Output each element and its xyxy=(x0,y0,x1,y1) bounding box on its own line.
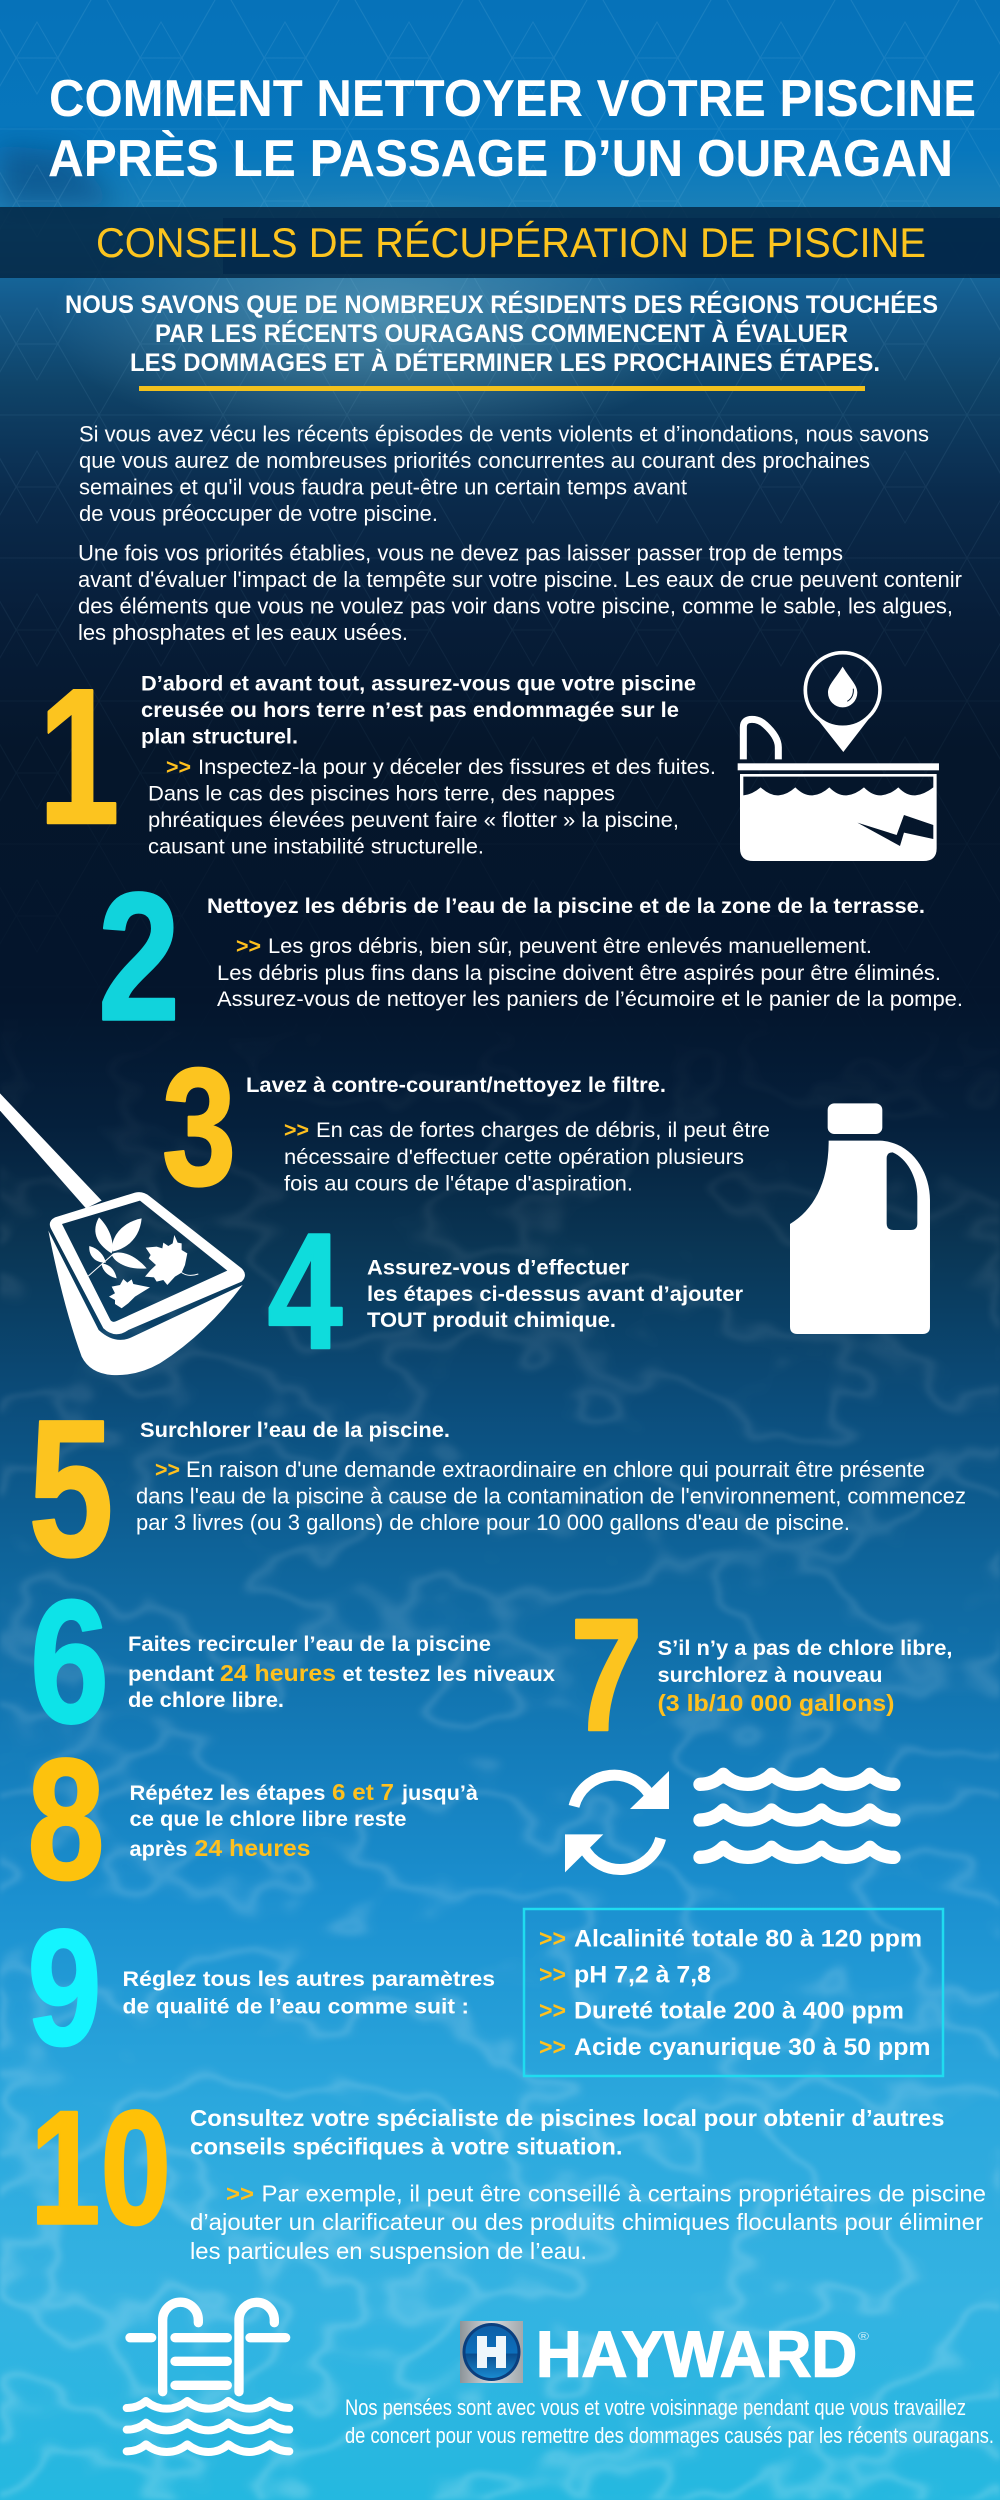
icon: chemical bottle xyxy=(790,1103,930,1334)
step 1 body: Inspectez-la pour y déceler des fissures et des fuites. xyxy=(198,756,716,779)
number 5: 5 xyxy=(28,1380,114,1598)
subtitle band: CONSEILS DE RÉCUPÉRATION DE PISCINE xyxy=(96,219,926,266)
step 1 body: Dans le cas des piscines hors terre, des nappes xyxy=(148,782,615,806)
intro heading: NOUS SAVONS QUE DE NOMBREUX RÉSIDENTS DES RÉGIONS TOUCHÉES xyxy=(65,290,938,319)
step 1 heading: plan structurel. xyxy=(141,726,298,748)
step 5 body: dans l'eau de la piscine à cause de la contamination de l'environnement, commencez xyxy=(136,1484,966,1508)
step 3 body: nécessaire d'effectuer cette opération plusieurs xyxy=(284,1146,744,1169)
step 9 text: Réglez tous les autres paramètres xyxy=(122,1968,495,1991)
number 1: 1 xyxy=(38,648,120,864)
step 6 text: et testez les niveaux xyxy=(342,1663,555,1686)
step 6 text: Faites recirculer l’eau de la piscine xyxy=(128,1633,491,1656)
paragraph 1: de vous préoccuper de votre piscine. xyxy=(79,501,438,526)
step 7 text: S’il n’y a pas de chlore libre, xyxy=(658,1637,952,1660)
step 8 text: Répétez les étapes xyxy=(130,1782,326,1805)
step 2 xyxy=(98,854,963,1058)
number 7: 7 xyxy=(570,1585,642,1764)
paragraph 1: que vous aurez de nombreuses priorités concurrentes au courant des prochaines xyxy=(79,448,870,473)
step 10 body: d’ajouter un clarificateur ou des produits chimiques floculants pour éliminer xyxy=(190,2209,983,2235)
step 3 xyxy=(162,1034,770,1220)
icon: pool ladder and water xyxy=(127,2302,289,2452)
paragraph 1 xyxy=(79,422,929,526)
water parameters box: Alcalinité totale 80 à 120 ppm xyxy=(574,1926,922,1952)
paragraph 2 xyxy=(78,540,962,645)
number 8: 8 xyxy=(28,1724,104,1916)
paragraph 2: des éléments que vous ne voulez pas voir dans votre piscine, comme le sable, les algues, xyxy=(78,594,953,618)
title xyxy=(48,70,976,188)
step 5 body: >> xyxy=(155,1457,180,1482)
icon: recirculation arrows xyxy=(565,1771,669,1872)
step 10 heading: Consultez votre spécialiste de piscines local pour obtenir d’autres xyxy=(190,2105,944,2131)
step 7 xyxy=(570,1585,952,1764)
step 9 xyxy=(28,1896,495,2080)
number 2: 2 xyxy=(98,854,180,1058)
water parameters box: Acide cyanurique 30 à 50 ppm xyxy=(574,2034,930,2061)
water parameters box: >> xyxy=(539,1962,566,1988)
logo wordmark: HAYWARD xyxy=(536,2318,857,2390)
step 5 xyxy=(28,1380,966,1598)
step 8 text: après xyxy=(130,1838,188,1861)
step 5 body xyxy=(136,1457,966,1535)
step 3 body xyxy=(284,1119,770,1196)
icon: damaged pool with water pin xyxy=(738,653,939,861)
step 4 text: TOUT produit chimique. xyxy=(367,1309,616,1332)
step 6 text: 24 heures xyxy=(220,1660,336,1686)
paragraph 1: Si vous avez vécu les récents épisodes de vents violents et d’inondations, nous savons xyxy=(79,422,929,446)
step 7 text: surchlorez à nouveau xyxy=(658,1664,882,1687)
step 1 xyxy=(38,648,716,864)
logo badge xyxy=(460,2321,523,2383)
water parameters box: >> xyxy=(539,1926,566,1952)
footer message xyxy=(345,2395,994,2448)
step 4 text: les étapes ci-dessus avant d’ajouter xyxy=(367,1283,743,1306)
step 9 text xyxy=(122,1968,495,2018)
water parameters box xyxy=(524,1909,943,2076)
step 3 body: fois au cours de l'étape d'aspiration. xyxy=(284,1172,633,1196)
step 7 text: (3 lb/10 000 gallons) xyxy=(658,1690,894,1716)
step 4 text xyxy=(367,1256,743,1332)
step 5 body: En raison d'une demande extraordinaire en chlore qui pourrait être présente xyxy=(186,1457,925,1482)
yellow rule xyxy=(139,386,865,391)
step 8 text xyxy=(130,1779,478,1861)
icon: leaf skimmer net xyxy=(0,1093,245,1375)
step 6 xyxy=(30,1565,555,1760)
step 1 body: phréatiques élevées peuvent faire « flotter » la piscine, xyxy=(148,809,679,832)
Hayward logo: ® xyxy=(858,2331,869,2343)
step 1 body: causant une instabilité structurelle. xyxy=(148,836,484,858)
paragraph 1: semaines et qu'il vous faudra peut-être un certain temps avant xyxy=(79,474,687,500)
step 3 heading: Lavez à contre-courant/nettoyez le filtre. xyxy=(246,1074,666,1097)
step 10 body: Par exemple, il peut être conseillé à certains propriétaires de piscine xyxy=(262,2180,986,2206)
step 1 heading xyxy=(141,672,696,748)
number 6: 6 xyxy=(30,1565,109,1760)
step 8 text: jusqu’à xyxy=(401,1782,478,1805)
water parameters box: >> xyxy=(539,1998,566,2024)
step 10 body xyxy=(190,2180,986,2264)
step 1 body xyxy=(148,756,716,858)
step 1 body: >> xyxy=(166,756,191,779)
step 2 heading: Nettoyez les débris de l’eau de la piscine et de la zone de la terrasse. xyxy=(207,895,925,918)
step 10 heading xyxy=(190,2105,944,2160)
water parameters box: pH 7,2 à 7,8 xyxy=(574,1962,711,1988)
step 4 text: Assurez-vous d’effectuer xyxy=(367,1256,629,1280)
step 7 text xyxy=(658,1637,952,1716)
step 6 text: pendant xyxy=(128,1663,214,1686)
intro heading: LES DOMMAGES ET À DÉTERMINER LES PROCHAINES ÉTAPES. xyxy=(130,348,880,377)
step 2 body xyxy=(217,935,963,1011)
number 9: 9 xyxy=(28,1896,102,2080)
title: APRÈS LE PASSAGE D’UN OURAGAN xyxy=(48,130,953,188)
step 2 body: Les gros débris, bien sûr, peuvent être enlevés manuellement. xyxy=(268,935,872,958)
number 4: 4 xyxy=(268,1199,342,1383)
water parameters box: Dureté totale 200 à 400 ppm xyxy=(574,1998,904,2024)
step 5 body: par 3 livres (ou 3 gallons) de chlore pour 10 000 gallons d'eau de piscine. xyxy=(136,1510,850,1535)
step 10 body: les particules en suspension de l’eau. xyxy=(190,2238,587,2264)
number 3: 3 xyxy=(162,1034,236,1220)
paragraph 2: avant d'évaluer l'impact de la tempête sur votre piscine. Les eaux de crue peuvent contenir xyxy=(78,567,962,592)
paragraph 2: les phosphates et les eaux usées. xyxy=(78,620,408,645)
step 3 body: >> xyxy=(284,1119,309,1142)
step 8 text: 24 heures xyxy=(194,1835,310,1861)
step 6 text xyxy=(128,1633,555,1712)
subtitle band xyxy=(0,207,1000,278)
step 4 xyxy=(268,1199,743,1383)
Hayward logo xyxy=(460,2318,869,2390)
icon: waves xyxy=(700,1774,894,1857)
step 2 body: Les débris plus fins dans la piscine doivent être aspirés pour être éliminés. xyxy=(217,962,941,985)
paragraph 2: Une fois vos priorités établies, vous ne devez pas laisser passer trop de temps xyxy=(78,540,843,566)
step 10 heading: conseils spécifiques à votre situation. xyxy=(190,2134,622,2160)
step 8 text: ce que le chlore libre reste xyxy=(130,1808,406,1831)
intro heading: PAR LES RÉCENTS OURAGANS COMMENCENT À ÉVALUER xyxy=(155,319,848,348)
step 8 xyxy=(28,1724,478,1916)
step 9 text: de qualité de l’eau comme suit : xyxy=(122,1996,469,2018)
step 2 body: Assurez-vous de nettoyer les paniers de l’écumoire et le panier de la pompe. xyxy=(217,988,963,1011)
step 1 heading: D’abord et avant tout, assurez-vous que votre piscine xyxy=(141,672,696,696)
step 6 text: de chlore libre. xyxy=(128,1689,284,1712)
step 3 body: En cas de fortes charges de débris, il peut être xyxy=(316,1119,770,1142)
step 10 xyxy=(30,2078,986,2264)
step 10 body: >> xyxy=(226,2180,254,2206)
number 10: 10 xyxy=(30,2078,171,2258)
step 5 heading: Surchlorer l’eau de la piscine. xyxy=(140,1419,450,1442)
step 2 body: >> xyxy=(236,935,261,958)
water parameters box: >> xyxy=(539,2034,566,2061)
step 1 heading: creusée ou hors terre n’est pas endommagée sur le xyxy=(141,699,679,722)
intro heading xyxy=(65,290,938,377)
step 8 text: 6 et 7 xyxy=(332,1779,394,1805)
